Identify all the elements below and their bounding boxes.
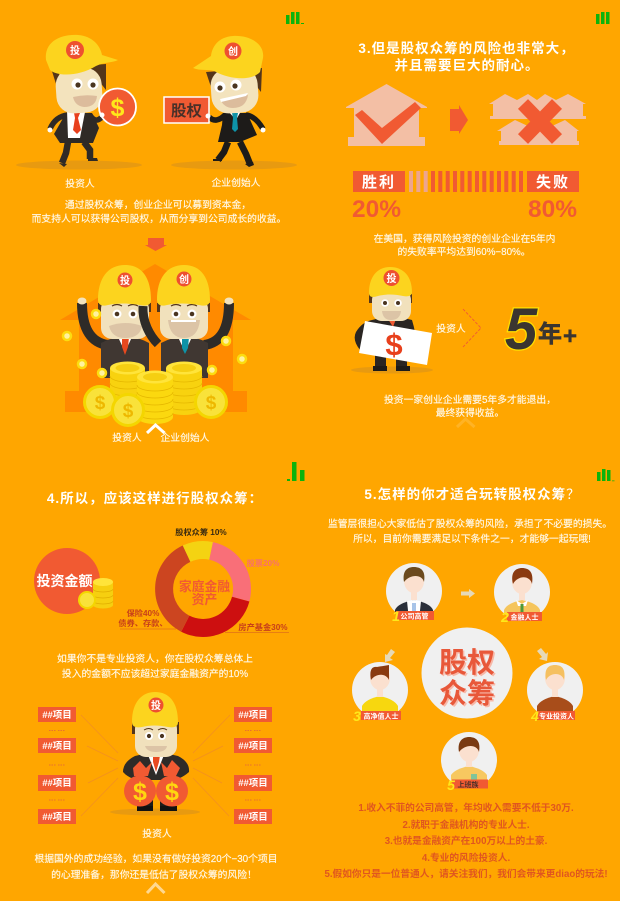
figure: founder with equity sign: 创	[228, 45, 238, 58]
person 5: office worker: 上班族	[458, 780, 478, 789]
list: qualification conditions: 4.专业的风险投资人.	[422, 851, 510, 864]
label: investor: 投资人	[436, 322, 466, 335]
icon: signal bars panel 4	[597, 469, 614, 481]
text: exit takes five years: 最终获得收益。	[436, 406, 504, 419]
text: regulator concern	[328, 517, 612, 545]
bar: fail label	[527, 171, 579, 192]
number: 5 years plus: 年	[538, 321, 562, 348]
person 1: executive: 1	[392, 608, 400, 624]
icon: central equity crowdfunding circle: 众筹	[439, 678, 495, 709]
label: investor: 投资人	[142, 827, 172, 840]
illustration: partners with coins in house	[60, 264, 251, 426]
text: US failure rate: 在美国，获得风险投资的创业企业在5年内	[374, 232, 555, 245]
list: qualification conditions: 1.收入不菲的公司高管，年均收入需要不低于30万.	[358, 801, 574, 814]
title: who suits: 5.怎样的你才适合玩转股权众筹？	[364, 486, 581, 502]
bar: fail label: 失败	[536, 173, 570, 191]
person 5: office worker	[441, 732, 497, 793]
text: regulator concern: 监管层很担心大家低估了股权众筹的风险，承担了不必要的损失。	[328, 517, 612, 530]
title: risk heading: 并且需要巨大的耐心。	[394, 57, 540, 73]
title: how to proceed: 4.所以，应该这样进行股权众筹：	[47, 490, 263, 506]
text: portfolio advice: 根据国外的成功经验，如果没有做好投资20个−30个项目	[34, 852, 278, 865]
figure: investor holding card: $	[385, 327, 403, 362]
icon: central equity crowdfunding circle: 众筹	[440, 680, 497, 710]
number: 20%: 20%	[352, 196, 401, 223]
arrow: to person 3	[385, 649, 395, 662]
number: 5 years plus: +	[563, 323, 577, 350]
title: risk heading: 3.但是股权众筹的风险也非常大，	[358, 40, 575, 56]
illustration: partners with coins in house: 创	[179, 273, 189, 286]
chart: household financial assets donut	[164, 550, 242, 628]
label: founder below: 企业创始人	[161, 431, 210, 444]
person 2: finance professional: 金融人士	[510, 612, 538, 622]
list: right project tags: ##项目	[238, 812, 268, 823]
text: regulator concern: 所以，目前你需要满足以下条件之一，才能够一起玩哦!	[353, 532, 591, 545]
person 4: professional investor: 4	[530, 708, 539, 724]
big coins: $	[95, 393, 106, 414]
list: left project tags	[38, 707, 76, 824]
figure: investor with money bags	[110, 692, 200, 816]
list: left project tags: ##项目	[42, 741, 72, 752]
lines: rays to projects	[81, 715, 230, 816]
bar: win label	[353, 171, 405, 192]
number: 5 years plus	[505, 297, 577, 362]
panel: risk	[346, 12, 610, 427]
label: property funds share: 房产基金30%	[238, 622, 288, 632]
text: equity crowdfunding explanation: 通过股权众筹，创业企业可以募到资本金，	[65, 198, 251, 211]
person 5: office worker: 5	[447, 777, 455, 793]
figure: investor with coin: 投	[70, 44, 80, 57]
panel: investor and founder	[16, 12, 304, 444]
person 3: high net worth	[352, 662, 408, 724]
figure: investor with money bags: 投	[151, 699, 161, 712]
icon: signal bars panel 3	[287, 462, 304, 481]
icon: house with check	[346, 84, 427, 146]
small coins	[63, 310, 246, 377]
panel: who qualifies	[324, 469, 614, 880]
person 1: executive	[386, 563, 442, 624]
label: stocks share: 股票20%	[247, 559, 280, 568]
big coins: $	[123, 401, 134, 422]
arrow: person 1 to 2	[461, 589, 475, 598]
list: left project tags: ##项目	[42, 812, 72, 823]
icon: chevron up	[147, 425, 164, 433]
icon: faint chevron	[457, 419, 474, 427]
list: right project tags: ##项目	[238, 778, 268, 789]
label: property funds share	[225, 622, 289, 632]
icon: collapsed houses with cross	[489, 94, 586, 145]
list: right project tags	[234, 707, 272, 824]
text: US failure rate: 的失败率平均达到60%−80%。	[397, 245, 531, 258]
label: investor below: 投资人	[112, 431, 142, 444]
text: equity crowdfunding explanation: 而支持人可以获得公司股权，从而分享到公司成长的收益。	[32, 212, 286, 225]
list: left project tags: ##项目	[42, 778, 72, 789]
illustration: partners with coins in house: 投	[120, 274, 130, 287]
label: equity crowdfunding share: 股权众筹 10%	[175, 527, 227, 537]
figure: investor with coin	[16, 35, 142, 170]
figure: investor with money bags: $	[133, 778, 147, 806]
figure: investor with money bags: $	[165, 778, 179, 806]
text: equity crowdfunding explanation	[32, 198, 286, 225]
list: qualification conditions: 2.就职于金融机构的专业人士.	[402, 818, 530, 831]
number: 5 years plus: 5	[505, 297, 538, 362]
list: left project tags: ##项目	[42, 710, 72, 721]
icon: chevron up light	[147, 884, 164, 893]
label: insurance share: 债券、存款、	[118, 618, 168, 628]
label: insurance share	[118, 608, 176, 629]
text: allocation advice: 如果你不是专业投资人，你在股权众筹总体上	[57, 652, 253, 665]
label: insurance share: 保险40%	[127, 608, 160, 618]
title: risk heading	[358, 40, 575, 73]
person 4: professional investor	[527, 662, 583, 724]
person 4: professional investor: 专业投资人	[539, 712, 574, 720]
big coins: $	[206, 393, 217, 414]
bar: win label: 胜利	[362, 174, 396, 191]
icon: central equity crowdfunding circle: 股权	[439, 647, 495, 678]
text: portfolio advice	[34, 852, 278, 881]
big coins	[84, 386, 226, 426]
panel: how to invest	[34, 462, 304, 893]
person 3: high net worth: 3	[353, 708, 361, 724]
figure: founder with equity sign	[164, 36, 297, 170]
label: donut centre: 家庭金融	[179, 579, 230, 594]
icon: dashed chevron	[463, 309, 481, 347]
arrow: to person 4	[537, 648, 548, 661]
text: exit takes five years: 投资一家创业企业需要5年多才能退出，	[384, 393, 556, 406]
bar: striped ratio	[409, 171, 523, 192]
list: right project tags: ##项目	[238, 741, 268, 752]
icon: signal bars panel 2	[596, 12, 610, 24]
figure: founder with equity sign: 股权	[171, 101, 202, 120]
text: portfolio advice: 的心理准备，那你还是低估了股权众筹的风险！	[51, 868, 257, 881]
icon: central equity crowdfunding circle	[422, 628, 512, 718]
list: qualification conditions: 3.也就是金融资产在100万以上的土豪.	[385, 834, 548, 847]
coin stacks	[110, 362, 202, 424]
text: US failure rate	[374, 232, 555, 258]
figure: investor holding card: 投	[386, 272, 396, 285]
text: exit takes five years	[384, 393, 556, 419]
arrow: right	[450, 105, 468, 134]
person 2: finance professional: 2	[500, 609, 509, 625]
text: allocation advice: 投入的金额不应该超过家庭金融资产的10%	[62, 667, 248, 680]
icon: investment amount circle with coins	[34, 548, 113, 614]
person 1: executive: 公司高管	[400, 612, 428, 620]
icon: central equity crowdfunding circle: 股权	[440, 648, 497, 680]
person 2: finance professional	[494, 564, 550, 625]
icon: signal bars panel 1	[286, 12, 304, 24]
text: allocation advice	[57, 652, 253, 680]
arrow: down	[145, 238, 167, 251]
list: right project tags: ##项目	[238, 710, 268, 721]
number: 80%: 80%	[528, 196, 577, 223]
icon: investment amount circle with coins: 投资金额	[36, 573, 92, 589]
label: investor: 投资人	[65, 177, 95, 190]
list: qualification conditions: 5.假如你只是一位普通人，请关注我们，我们会带来更diao的玩法!	[324, 867, 608, 880]
figure: investor with coin: $	[111, 94, 125, 122]
label: founder: 企业创始人	[212, 176, 261, 189]
list: qualification conditions	[324, 801, 608, 880]
label: donut centre	[179, 579, 230, 607]
label: donut centre: 资产	[192, 592, 217, 607]
figure: investor holding card	[351, 267, 433, 374]
person 3: high net worth: 高净值人士	[364, 712, 398, 720]
